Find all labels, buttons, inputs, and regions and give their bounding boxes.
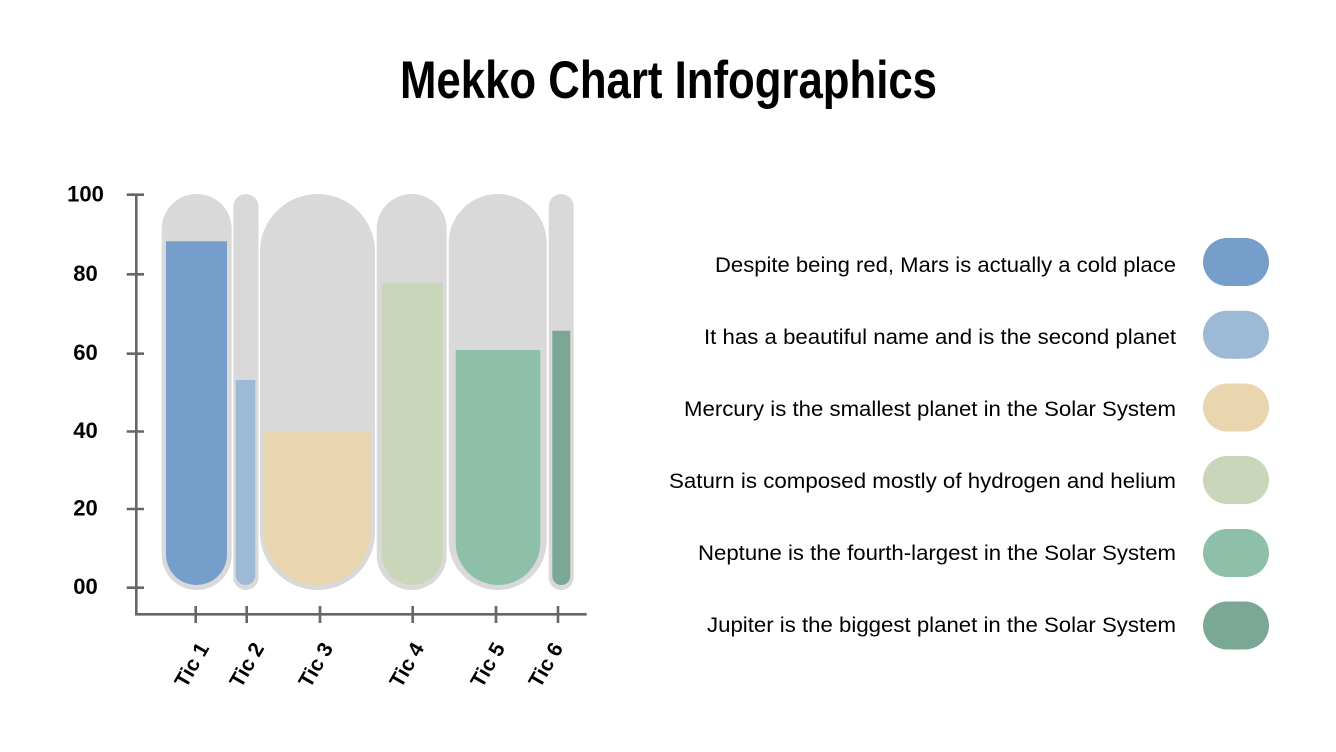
x axis labels: Tic 3 bbox=[294, 639, 338, 692]
x axis bbox=[135, 606, 587, 623]
y axis labels bbox=[67, 182, 104, 599]
y axis labels: 00 bbox=[73, 574, 98, 599]
legend item: Mars bbox=[715, 238, 1269, 286]
x axis labels bbox=[170, 639, 568, 692]
column: Tic 3 bbox=[260, 194, 375, 590]
x axis labels: Tic 1 bbox=[170, 639, 214, 692]
x axis labels: Tic 2 bbox=[225, 639, 269, 692]
x axis labels: Tic 5 bbox=[466, 639, 510, 692]
column: Tic 5 bbox=[449, 194, 547, 590]
legend item: Neptune bbox=[698, 529, 1269, 577]
column: Tic 6 bbox=[549, 194, 574, 590]
legend item: Jupiter bbox=[707, 602, 1269, 650]
y axis labels: 80 bbox=[73, 261, 98, 286]
legend item: Mercury: Mercury is the smallest planet in the Solar System bbox=[684, 398, 1176, 421]
legend item: Jupiter: Jupiter is the biggest planet in the Solar System bbox=[707, 614, 1176, 637]
column: Tic 1 bbox=[162, 194, 232, 590]
y axis labels: 40 bbox=[73, 418, 98, 443]
legend item: Saturn bbox=[669, 456, 1269, 504]
x axis labels: Tic 6 bbox=[524, 639, 568, 692]
legend item: Venus: It has a beautiful name and is the second planet bbox=[704, 326, 1176, 349]
y axis bbox=[127, 194, 144, 614]
mekko chart bbox=[67, 182, 587, 692]
y axis labels: 20 bbox=[73, 496, 98, 520]
column: Tic 2 bbox=[233, 194, 258, 590]
x axis labels: Tic 4 bbox=[385, 639, 429, 692]
y axis labels: 60 bbox=[73, 340, 98, 365]
legend item: Venus bbox=[704, 311, 1269, 359]
legend item: Saturn: Saturn is composed mostly of hydrogen and helium bbox=[669, 470, 1176, 493]
legend item: Mars: Despite being red, Mars is actually a cold place bbox=[715, 254, 1176, 277]
title: Mekko Chart Infographics bbox=[400, 51, 937, 110]
legend bbox=[669, 238, 1269, 650]
y axis labels: 100 bbox=[67, 182, 104, 206]
legend item: Mercury bbox=[684, 384, 1269, 432]
legend item: Neptune: Neptune is the fourth-largest in the Solar System bbox=[698, 542, 1176, 565]
column: Tic 4 bbox=[377, 194, 447, 590]
